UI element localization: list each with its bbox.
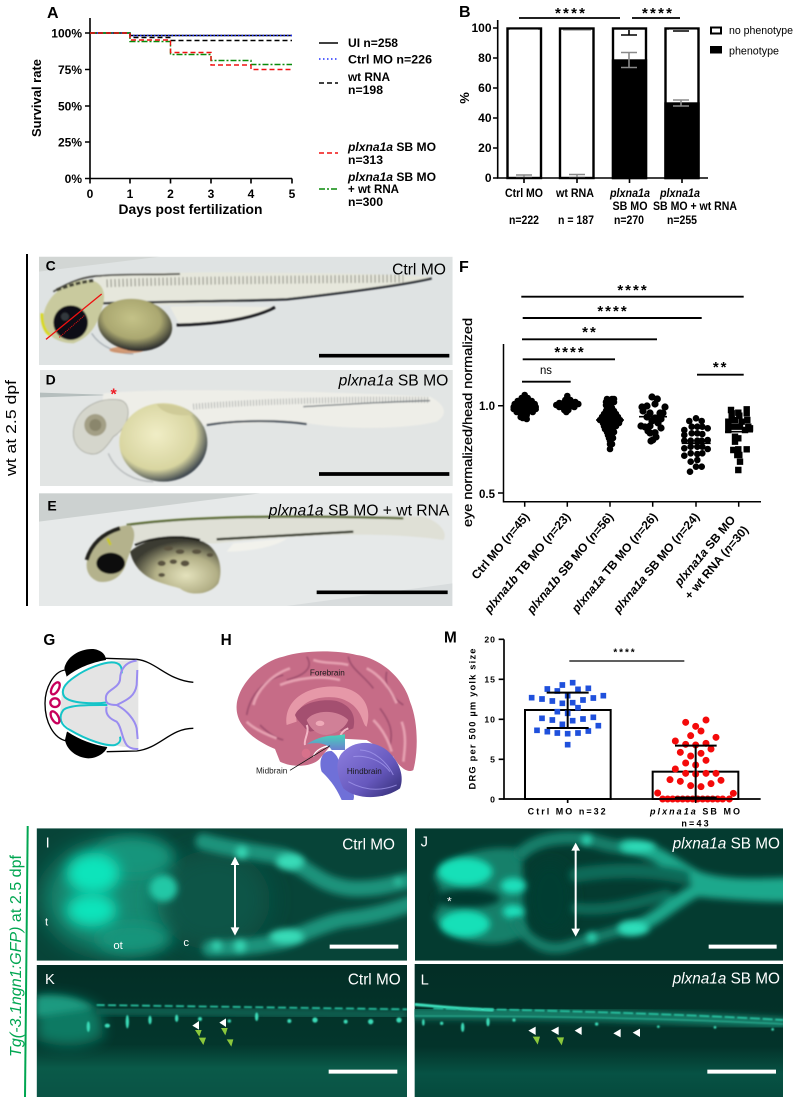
bar group labels: n=255 <box>667 215 698 227</box>
arrowheads L <box>528 1027 640 1037</box>
bar group labels: n=270 <box>614 215 644 227</box>
corpus callosum <box>286 687 368 727</box>
significance brackets <box>519 5 680 22</box>
letter M: M <box>444 629 457 646</box>
survival legend: plxna1a SB MO <box>347 170 436 184</box>
hindbrain and brainstem <box>320 751 354 800</box>
bar group labels: n=222 <box>509 215 539 227</box>
DRG y ticks <box>484 635 496 804</box>
DRG x labels: Ctrl MO n=32 <box>528 806 606 816</box>
brain labels: Forebrain <box>310 669 345 678</box>
rotated group labels: plxna1a SB MO <box>671 513 738 590</box>
labels K <box>46 973 400 984</box>
gray brain fill <box>60 660 138 749</box>
survival axis tick labels: 50% <box>58 100 82 114</box>
labels K: K <box>45 972 55 988</box>
survival legend: + wt RNA <box>348 182 399 196</box>
letter G: G <box>43 632 55 649</box>
significance lines and stars: ** <box>713 359 729 376</box>
survival chart axes <box>85 18 292 184</box>
survival legend: UI n=258 <box>348 36 398 50</box>
brain labels: Hindbrain <box>347 767 382 776</box>
sulci <box>247 657 403 745</box>
fluorescent signal J <box>433 835 787 948</box>
black eyes <box>64 649 107 758</box>
bar chart axes <box>493 20 708 183</box>
dots: plxna1b TB MO <box>556 396 578 412</box>
bar y tick labels: 40 <box>478 111 492 125</box>
panel J: plxna1a SB MO dorsal fluorescence <box>415 828 787 961</box>
significance lines and stars: **** <box>597 303 629 320</box>
DRG x labels: n=43 <box>681 819 709 829</box>
stalk highlights <box>305 725 348 745</box>
survival legend: Ctrl MO n=226 <box>348 52 432 66</box>
panel D: plxna1a SB MO larva photo <box>40 370 453 486</box>
panel E: plxna1a SB MO plus wt RNA larva photo <box>39 493 452 606</box>
dots: plxna1a SB MO + wt RNA <box>728 409 750 470</box>
labels J: * <box>447 894 452 908</box>
bar group labels <box>505 188 737 227</box>
bar group labels: plxna1a <box>609 188 651 200</box>
bar y tick labels: 20 <box>478 141 492 155</box>
fluorescent signal L <box>410 1004 787 1032</box>
survival legend <box>319 36 436 209</box>
dots: Ctrl MO <box>514 395 536 419</box>
label Ctrl MO: Ctrl MO <box>392 261 446 278</box>
survival legend: wt RNA <box>347 70 390 84</box>
magenta ovals <box>49 681 62 725</box>
survival x tick labels: 5 <box>289 187 296 201</box>
panel B: phenotype stacked bars <box>457 4 793 227</box>
bar y tick labels: 80 <box>478 51 492 65</box>
survival legend: n=313 <box>348 153 383 167</box>
side label: wt at 2.5 dpf: wt at 2.5 dpf <box>4 379 20 477</box>
fish D body <box>73 390 444 482</box>
survival x tick labels: 2 <box>167 187 174 201</box>
DRG x labels <box>528 806 740 829</box>
red circles <box>658 720 733 799</box>
scale bar K <box>328 1070 398 1074</box>
DRG y ticks: 20 <box>484 635 496 645</box>
fish E body <box>87 515 445 594</box>
DRG y title: DRG per 500 µm yolk size <box>467 648 477 789</box>
rotated group labels: plxna1a TB MO (n=26) <box>568 510 660 616</box>
cerebrum <box>237 651 417 771</box>
midbrain pointer <box>290 746 330 770</box>
side label: transgenic line: Tg(-3.1ngn1:GFP) at 2.5 dpf <box>8 854 25 1057</box>
letter F: F <box>459 259 469 276</box>
bar y tick labels: 0 <box>485 171 492 185</box>
panel F: eye/head ratio dot plot <box>459 259 761 617</box>
panel I: Ctrl MO dorsal fluorescence <box>37 828 412 961</box>
dot plot y ticks <box>479 401 496 501</box>
rotated group labels: plxna1a SB MO (n=24) <box>610 510 702 617</box>
DRG y ticks: 15 <box>484 675 496 685</box>
survival axis tick labels <box>51 26 82 186</box>
bar y tick labels: 60 <box>478 81 492 95</box>
error bars <box>510 30 697 178</box>
measurement line in red <box>46 294 102 339</box>
significance line: **** <box>613 647 635 658</box>
panel K: Ctrl MO lateral fluorescence <box>37 965 407 1097</box>
bar group labels: plxna1a <box>659 188 701 200</box>
scale bar L <box>707 1070 776 1074</box>
panel H: human brain illustration <box>221 632 417 800</box>
rotated group labels: plxna1b SB MO (n=56) <box>523 510 616 617</box>
labels I: t <box>45 916 49 928</box>
midbrain teal <box>307 734 345 750</box>
significance lines and stars: ** <box>582 324 598 341</box>
survival axis tick labels: 25% <box>58 136 82 150</box>
survival x tick labels <box>87 187 296 201</box>
rotated group labels: plxna1b TB MO (n=23) <box>481 510 573 617</box>
red asterisk: * <box>111 386 118 403</box>
labels I: I <box>46 835 50 851</box>
DRG axes <box>499 639 761 803</box>
labels L <box>422 972 780 987</box>
y axis title: Survival rate <box>29 59 44 137</box>
letter E: E <box>47 498 57 514</box>
bar group labels: SB MO <box>612 201 648 213</box>
bar y tick labels: 100 <box>471 21 492 35</box>
bar y axis title: % <box>457 92 472 104</box>
mean lines <box>596 417 753 443</box>
scale bar D <box>319 472 450 476</box>
rotated group labels: + wt RNA (n=30) <box>682 523 751 602</box>
bar y tick labels <box>471 21 492 185</box>
x axis title: Days post fertilization <box>118 202 262 217</box>
scale bar C <box>319 354 450 358</box>
DRG y ticks: 0 <box>490 794 496 804</box>
fluorescent signal K <box>37 995 407 1046</box>
survival x tick labels: 3 <box>208 187 215 201</box>
survival x tick labels: 0 <box>87 187 94 201</box>
significance lines and stars: **** <box>554 344 586 361</box>
labels L: plxna1a SB MO <box>672 970 780 987</box>
brain labels <box>256 669 382 776</box>
bar group labels: SB MO + wt RNA <box>653 201 737 213</box>
arrowheads K <box>192 1018 226 1030</box>
significance line <box>569 647 684 661</box>
letter C: C <box>46 258 56 274</box>
bar legend <box>710 25 793 58</box>
labels I: c <box>183 937 189 949</box>
dot plot axes <box>498 344 761 507</box>
survival curves <box>90 33 292 70</box>
error bars <box>547 693 717 798</box>
significance lines and stars: ns <box>540 363 552 377</box>
scale bar J <box>708 944 777 949</box>
lavender outlines <box>106 661 138 749</box>
labels K: Ctrl MO <box>348 971 401 988</box>
survival axis tick labels: 75% <box>58 63 82 77</box>
thalamus <box>307 712 348 735</box>
survival x tick labels: 1 <box>127 187 134 201</box>
DRG bars <box>525 710 738 799</box>
panel A: survival curves <box>29 5 436 217</box>
dot plot y ticks: 0.5 <box>479 489 496 501</box>
label plxna1a SB MO D: plxna1a SB MO <box>338 372 448 389</box>
survival axis tick labels: 100% <box>51 26 82 40</box>
labels I: Ctrl MO <box>342 837 395 854</box>
survival axis tick labels: 0% <box>65 172 82 186</box>
panel letter A: A <box>47 5 59 22</box>
bar group labels: n = 187 <box>558 215 594 227</box>
labels J: J <box>421 835 428 851</box>
survival legend: plxna1a SB MO <box>347 140 436 154</box>
survival x tick labels: 4 <box>248 187 255 201</box>
brain labels: Midbrain <box>256 767 287 776</box>
significance lines and stars <box>521 282 744 382</box>
dot plot y ticks: 1.0 <box>479 401 495 413</box>
labels L: L <box>421 973 429 989</box>
head outline <box>45 658 193 752</box>
panel L: plxna1a SB MO lateral fluorescence <box>410 964 787 1098</box>
dots: plxna1b SB MO <box>600 399 620 449</box>
panel C: Ctrl MO larva photo <box>39 257 453 365</box>
scale bar E <box>316 590 448 594</box>
dots: plxna1a SB MO <box>684 418 708 472</box>
bar legend: phenotype <box>729 46 779 58</box>
letter H: H <box>221 632 232 649</box>
labels J <box>420 836 780 902</box>
rotated group labels: Ctrl MO (n=45) <box>469 510 532 582</box>
rotated group labels <box>469 510 751 617</box>
label plxna1a SB MO + wt RNA: plxna1a SB MO + wt RNA <box>268 502 450 519</box>
panel M: DRG bar chart <box>444 629 761 829</box>
significance brackets: **** <box>555 5 585 22</box>
DRG x labels: plxna1a SB MO <box>649 806 740 816</box>
survival legend: n=198 <box>348 83 383 97</box>
scale bar I <box>330 944 398 949</box>
significance brackets: **** <box>642 5 672 22</box>
teal outlines <box>61 662 122 745</box>
letter D: D <box>46 372 56 388</box>
survival legend: n=300 <box>348 195 383 209</box>
double arrow I <box>231 857 239 936</box>
stacked bars <box>508 28 698 178</box>
panel G: zebrafish brain schematic <box>43 632 193 758</box>
labels J: plxna1a SB MO <box>672 836 780 853</box>
DRG y ticks: 5 <box>490 754 496 764</box>
dot plot y title: eye normalized/head normalized <box>461 318 475 527</box>
blue squares <box>532 683 603 745</box>
dots: plxna1a TB MO <box>641 397 665 441</box>
inner darker region <box>295 700 354 732</box>
labels I: ot <box>113 940 124 952</box>
fluorescent signal I <box>43 837 412 953</box>
bar legend: no phenotype <box>729 25 793 37</box>
DRG y ticks: 10 <box>484 715 496 725</box>
labels I <box>45 835 395 952</box>
panel letter B: B <box>459 4 471 21</box>
double arrow J <box>571 843 580 937</box>
bar group labels: Ctrl MO <box>505 188 543 200</box>
gyri highlights <box>247 660 405 762</box>
significance lines and stars: **** <box>617 282 649 299</box>
fish C body <box>42 272 432 356</box>
bar group labels: wt RNA <box>555 188 594 200</box>
